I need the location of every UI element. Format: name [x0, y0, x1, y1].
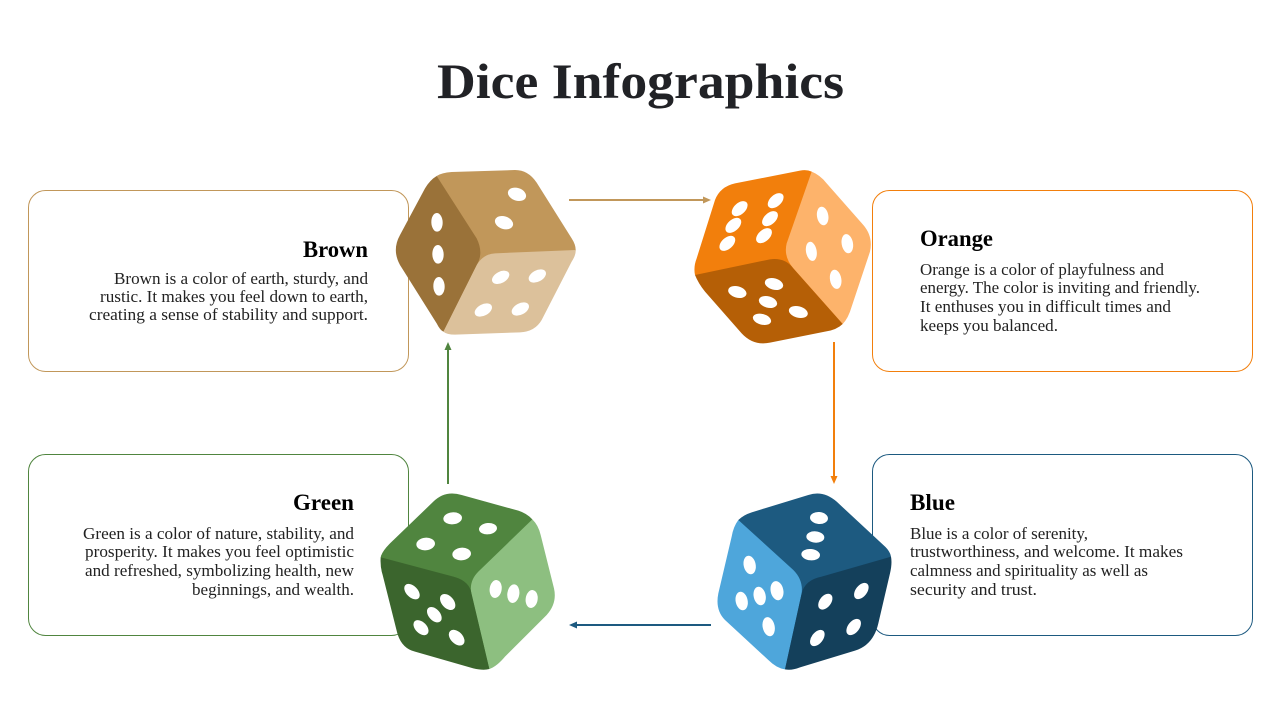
- text block: orange: energy. The color is inviting and friendly.: [920, 278, 1200, 297]
- text block: green: and refreshed, symbolizing health, new: [85, 561, 355, 580]
- text block: blue: calmness and spirituality as well as: [910, 561, 1148, 580]
- arrow: blue to green: [569, 622, 711, 628]
- text block: green: [83, 524, 355, 599]
- arrow: green to brown: [444, 342, 452, 484]
- text block: orange: keeps you balanced.: [920, 316, 1058, 335]
- heading: brown: Brown: [303, 237, 368, 262]
- arrow: orange to blue: [830, 342, 838, 484]
- panel: blue: [872, 454, 1252, 636]
- text block: orange: Orange is a color of playfulness and: [920, 260, 1164, 279]
- text block: brown: Brown is a color of earth, sturdy, and: [114, 269, 368, 288]
- panel outline: green: [28, 454, 408, 636]
- text block: orange: It enthuses you in difficult times and: [920, 297, 1172, 316]
- panel: green: [28, 454, 408, 636]
- text block: blue: security and trust.: [910, 580, 1037, 599]
- panel: brown: [28, 190, 408, 372]
- icon: green die: [381, 493, 555, 670]
- arrow: brown to orange: [569, 196, 711, 204]
- text block: green: prosperity. It makes you feel optimistic: [85, 542, 354, 561]
- panel outline: brown: [28, 190, 408, 372]
- text block: green: beginnings, and wealth.: [192, 580, 354, 599]
- icon: blue die: [717, 493, 891, 670]
- panel outline: blue: [872, 454, 1252, 636]
- heading: blue: Blue: [910, 490, 955, 515]
- text block: brown: [89, 269, 368, 324]
- panel outline: orange: [872, 190, 1252, 372]
- heading: green: Green: [293, 490, 354, 515]
- text block: blue: [910, 524, 1183, 599]
- heading: orange: Orange: [920, 226, 993, 251]
- text block: brown: creating a sense of stability and support.: [89, 305, 368, 324]
- title: Dice Infographics: [437, 53, 844, 109]
- text block: blue: trustworthiness, and welcome. It makes: [910, 542, 1183, 561]
- icon: brown die: [396, 170, 576, 335]
- text block: brown: rustic. It makes you feel down to earth,: [100, 287, 368, 306]
- text block: blue: Blue is a color of serenity,: [910, 524, 1088, 543]
- text block: green: Green is a color of nature, stability, and: [83, 524, 354, 543]
- panel: orange: [872, 190, 1252, 372]
- icon: orange die: [694, 170, 871, 343]
- text block: orange: [920, 260, 1200, 335]
